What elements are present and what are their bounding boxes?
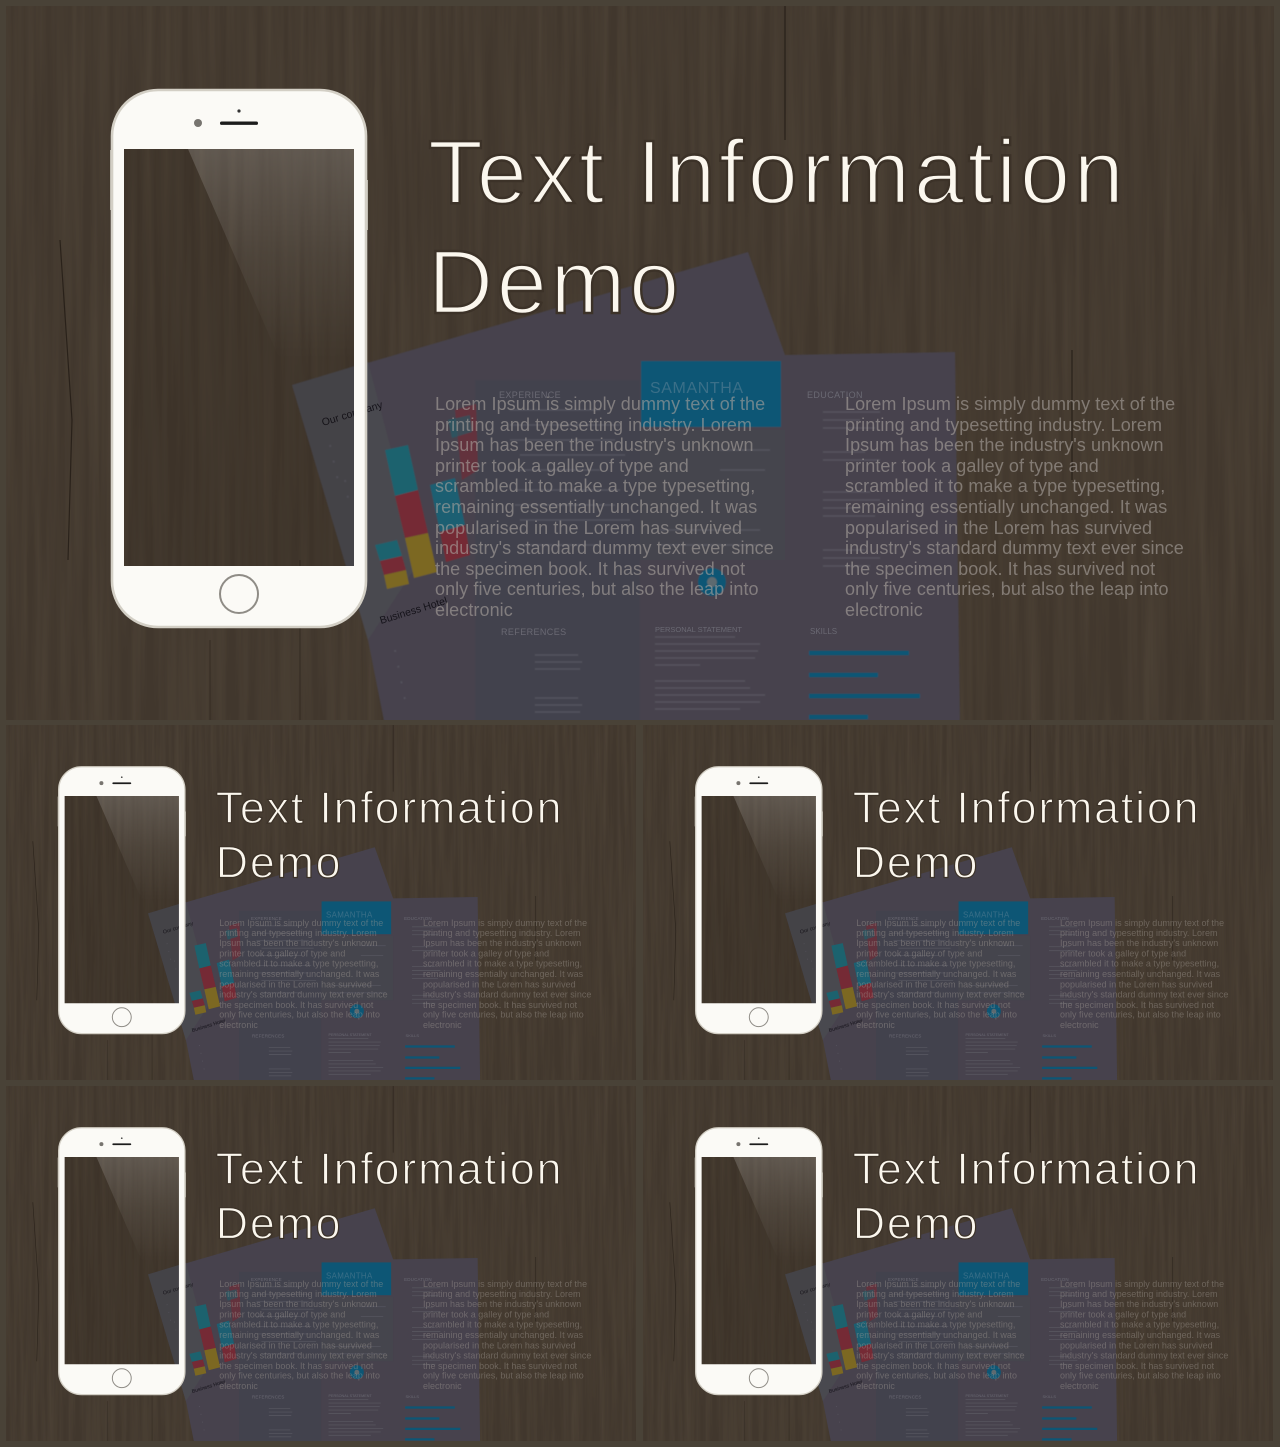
text block: right column: Ipsum has been the industry's unknown: [1060, 938, 1218, 948]
heading: Demo: [216, 838, 342, 888]
text block: left column: electronic: [219, 1381, 258, 1391]
text block: left column: Ipsum has been the industry's unknown: [219, 938, 378, 948]
text block: right column: industry's standard dummy text ever since: [423, 1350, 591, 1360]
text block: left column: [219, 1279, 388, 1391]
text block: right column: scrambled it to make a type typesetting,: [1060, 959, 1219, 969]
text block: right column: printing and typesetting industry. Lorem: [845, 415, 1162, 435]
text block: right column: printing and typesetting industry. Lorem: [1060, 1289, 1218, 1299]
text block: right column: Lorem Ipsum is simply dummy text of the: [1060, 918, 1224, 928]
text block: right column: printing and typesetting industry. Lorem: [423, 928, 581, 938]
text block: left column: remaining essentially unchanged. It was: [856, 969, 1016, 979]
heading: Demo: [853, 1199, 979, 1249]
text block: right column: only five centuries, but also the leap into: [423, 1371, 584, 1381]
text block: right column: scrambled it to make a type typesetting,: [845, 476, 1165, 496]
text block: left column: remaining essentially unchanged. It was: [219, 1330, 379, 1340]
text block: right column: Lorem Ipsum is simply dummy text of the: [1060, 1279, 1224, 1289]
heading: Text Information: [853, 1144, 1200, 1194]
documents with charts: [148, 1208, 480, 1441]
panel: slide top right: [643, 725, 1273, 1080]
text block: right column: electronic: [845, 600, 923, 620]
text block: right column: the specimen book. It has survived not: [1060, 1000, 1214, 1010]
text block: right column: Ipsum has been the industry's unknown: [423, 938, 581, 948]
wood background: [643, 725, 1273, 1080]
text block: right column: the specimen book. It has survived not: [845, 559, 1155, 579]
text block: left column: printer took a galley of type and: [856, 1310, 982, 1319]
text block: left column: Ipsum has been the industry's unknown: [856, 938, 1015, 948]
text block: right column: printing and typesetting industry. Lorem: [423, 1289, 581, 1299]
text block: left column: printer took a galley of type and: [219, 949, 345, 958]
text block: left column: scrambled it to make a type typesetting,: [219, 1320, 378, 1330]
text block: right column: scrambled it to make a type typesetting,: [1060, 1320, 1219, 1330]
panel: slide bottom right: [643, 1086, 1273, 1441]
text block: left column: Ipsum has been the industry's unknown: [219, 1299, 378, 1309]
text block: left column: only five centuries, but also the leap into: [856, 1371, 1017, 1381]
heading: Text Information: [428, 123, 1127, 223]
text block: right column: printer took a galley of type and: [845, 456, 1099, 476]
text block: left column: popularised in the Lorem has survived: [856, 1340, 1009, 1350]
text block: right column: scrambled it to make a type typesetting,: [423, 959, 582, 969]
text block: right column: remaining essentially unchanged. It was: [1060, 969, 1220, 979]
panel: slide top left: [6, 725, 636, 1080]
text block: left column: Ipsum has been the industry's unknown: [856, 1299, 1015, 1309]
text block: right column: the specimen book. It has survived not: [1060, 1361, 1214, 1371]
text block: right column: scrambled it to make a type typesetting,: [423, 1320, 582, 1330]
text block: right column: electronic: [1060, 1381, 1099, 1391]
text block: left column: scrambled it to make a type typesetting,: [856, 959, 1015, 969]
heading: Text Information: [216, 783, 563, 833]
text block: left column: [435, 394, 774, 620]
text block: left column: only five centuries, but also the leap into: [435, 579, 759, 599]
text block: left column: remaining essentially unchanged. It was: [219, 969, 379, 979]
text block: right column: [423, 1279, 591, 1391]
text block: right column: industry's standard dummy text ever since: [1060, 1350, 1228, 1360]
text block: left column: [856, 1279, 1025, 1391]
text block: left column: printing and typesetting industry. Lorem: [219, 928, 377, 938]
text block: left column: industry's standard dummy text ever since: [435, 538, 774, 558]
text block: right column: printer took a galley of type and: [423, 949, 549, 958]
text block: right column: printer took a galley of type and: [423, 1310, 549, 1319]
text block: right column: only five centuries, but also the leap into: [845, 579, 1169, 599]
text block: right column: [423, 918, 591, 1030]
heading: Text Information: [216, 1144, 563, 1194]
text block: right column: popularised in the Lorem has survived: [845, 518, 1152, 538]
text block: left column: the specimen book. It has survived not: [856, 1361, 1010, 1371]
text block: right column: only five centuries, but also the leap into: [1060, 1010, 1221, 1020]
text block: right column: [1060, 918, 1228, 1030]
text block: left column: electronic: [856, 1020, 895, 1030]
heading: Text Information: [853, 783, 1200, 833]
text block: left column: Lorem Ipsum is simply dummy text of the: [219, 1279, 383, 1289]
icon: smartphone: [694, 1127, 823, 1396]
text block: left column: electronic: [219, 1020, 258, 1030]
text block: left column: industry's standard dummy text ever since: [219, 1350, 388, 1360]
text block: right column: Ipsum has been the industry's unknown: [423, 1299, 581, 1309]
text block: left column: printing and typesetting industry. Lorem: [856, 928, 1014, 938]
text block: left column: popularised in the Lorem has survived: [219, 1340, 372, 1350]
text block: right column: industry's standard dummy text ever since: [1060, 989, 1228, 999]
text block: right column: the specimen book. It has survived not: [423, 1000, 577, 1010]
documents with charts: [148, 848, 480, 1080]
text block: right column: only five centuries, but also the leap into: [1060, 1371, 1221, 1381]
wood background: [643, 1086, 1273, 1441]
text block: left column: printing and typesetting industry. Lorem: [435, 415, 752, 435]
text block: left column: industry's standard dummy text ever since: [856, 1350, 1025, 1360]
text block: left column: only five centuries, but also the leap into: [219, 1371, 380, 1381]
text block: right column: only five centuries, but also the leap into: [423, 1010, 584, 1020]
text block: right column: industry's standard dummy text ever since: [423, 989, 591, 999]
heading: [216, 1144, 563, 1249]
text block: right column: industry's standard dummy text ever since: [845, 538, 1184, 558]
wood background: [6, 6, 1274, 720]
text block: left column: Ipsum has been the industry's unknown: [435, 435, 754, 455]
text block: left column: Lorem Ipsum is simply dummy text of the: [856, 918, 1020, 928]
text block: right column: remaining essentially unchanged. It was: [1060, 1330, 1220, 1340]
text block: right column: electronic: [1060, 1020, 1099, 1030]
text block: left column: popularised in the Lorem has survived: [856, 979, 1009, 989]
text block: right column: the specimen book. It has survived not: [423, 1361, 577, 1371]
text block: left column: popularised in the Lorem has survived: [219, 979, 372, 989]
text block: right column: popularised in the Lorem has survived: [1060, 1340, 1213, 1350]
text block: left column: printing and typesetting industry. Lorem: [219, 1289, 377, 1299]
text block: right column: printer took a galley of type and: [1060, 1310, 1186, 1319]
heading: Demo: [216, 1199, 342, 1249]
documents with charts: [785, 1208, 1117, 1441]
text block: left column: printing and typesetting industry. Lorem: [856, 1289, 1014, 1299]
heading: [853, 1144, 1200, 1249]
icon: smartphone: [58, 1127, 186, 1396]
text block: left column: Lorem Ipsum is simply dummy text of the: [856, 1279, 1020, 1289]
text block: right column: [845, 394, 1184, 620]
text block: left column: electronic: [856, 1381, 895, 1391]
text block: right column: remaining essentially unchanged. It was: [423, 969, 583, 979]
heading: Demo: [853, 838, 979, 888]
text block: right column: popularised in the Lorem has survived: [1060, 979, 1213, 989]
text block: left column: the specimen book. It has survived not: [856, 1000, 1010, 1010]
text block: right column: popularised in the Lorem has survived: [423, 1340, 576, 1350]
text block: right column: printing and typesetting industry. Lorem: [1060, 928, 1218, 938]
text block: right column: Lorem Ipsum is simply dummy text of the: [845, 394, 1175, 414]
text block: right column: Ipsum has been the industry's unknown: [1060, 1299, 1218, 1309]
text block: left column: the specimen book. It has survived not: [435, 559, 745, 579]
heading: [216, 783, 563, 888]
text block: left column: electronic: [435, 600, 513, 620]
text block: left column: only five centuries, but also the leap into: [219, 1010, 380, 1020]
text block: right column: popularised in the Lorem has survived: [423, 979, 576, 989]
text block: left column: printer took a galley of type and: [219, 1310, 345, 1319]
text block: right column: electronic: [423, 1381, 462, 1391]
panel: slide bottom left: [6, 1086, 636, 1441]
text block: left column: scrambled it to make a type typesetting,: [435, 476, 755, 496]
text block: right column: remaining essentially unchanged. It was: [845, 497, 1167, 517]
text block: left column: remaining essentially unchanged. It was: [856, 1330, 1016, 1340]
heading: Demo: [428, 233, 683, 333]
text block: left column: industry's standard dummy text ever since: [219, 989, 388, 999]
wood background: [6, 1086, 636, 1441]
documents with charts: [292, 252, 960, 720]
text block: left column: printer took a galley of type and: [856, 949, 982, 958]
text block: left column: only five centuries, but also the leap into: [856, 1010, 1017, 1020]
heading: [428, 123, 1127, 333]
text block: right column: Ipsum has been the industry's unknown: [845, 435, 1164, 455]
text block: left column: [219, 918, 388, 1030]
text block: left column: industry's standard dummy text ever since: [856, 989, 1025, 999]
wood background: [6, 725, 636, 1080]
text block: left column: printer took a galley of type and: [435, 456, 689, 476]
text block: left column: the specimen book. It has survived not: [219, 1000, 373, 1010]
text block: right column: remaining essentially unchanged. It was: [423, 1330, 583, 1340]
icon: smartphone: [110, 88, 368, 628]
text block: left column: popularised in the Lorem has survived: [435, 518, 742, 538]
text block: left column: the specimen book. It has survived not: [219, 1361, 373, 1371]
text block: left column: Lorem Ipsum is simply dummy text of the: [219, 918, 383, 928]
icon: smartphone: [694, 766, 823, 1034]
text block: left column: remaining essentially unchanged. It was: [435, 497, 757, 517]
icon: smartphone: [58, 766, 186, 1034]
text block: left column: scrambled it to make a type typesetting,: [219, 959, 378, 969]
text block: left column: scrambled it to make a type typesetting,: [856, 1320, 1015, 1330]
text block: right column: printer took a galley of type and: [1060, 949, 1186, 958]
heading: [853, 783, 1200, 888]
text block: left column: [856, 918, 1025, 1030]
documents with charts: [785, 848, 1117, 1080]
text block: right column: [1060, 1279, 1228, 1391]
text block: right column: electronic: [423, 1020, 462, 1030]
text block: right column: Lorem Ipsum is simply dummy text of the: [423, 918, 587, 928]
text block: left column: Lorem Ipsum is simply dummy text of the: [435, 394, 765, 414]
text block: right column: Lorem Ipsum is simply dummy text of the: [423, 1279, 587, 1289]
panel: main slide: [6, 6, 1274, 720]
